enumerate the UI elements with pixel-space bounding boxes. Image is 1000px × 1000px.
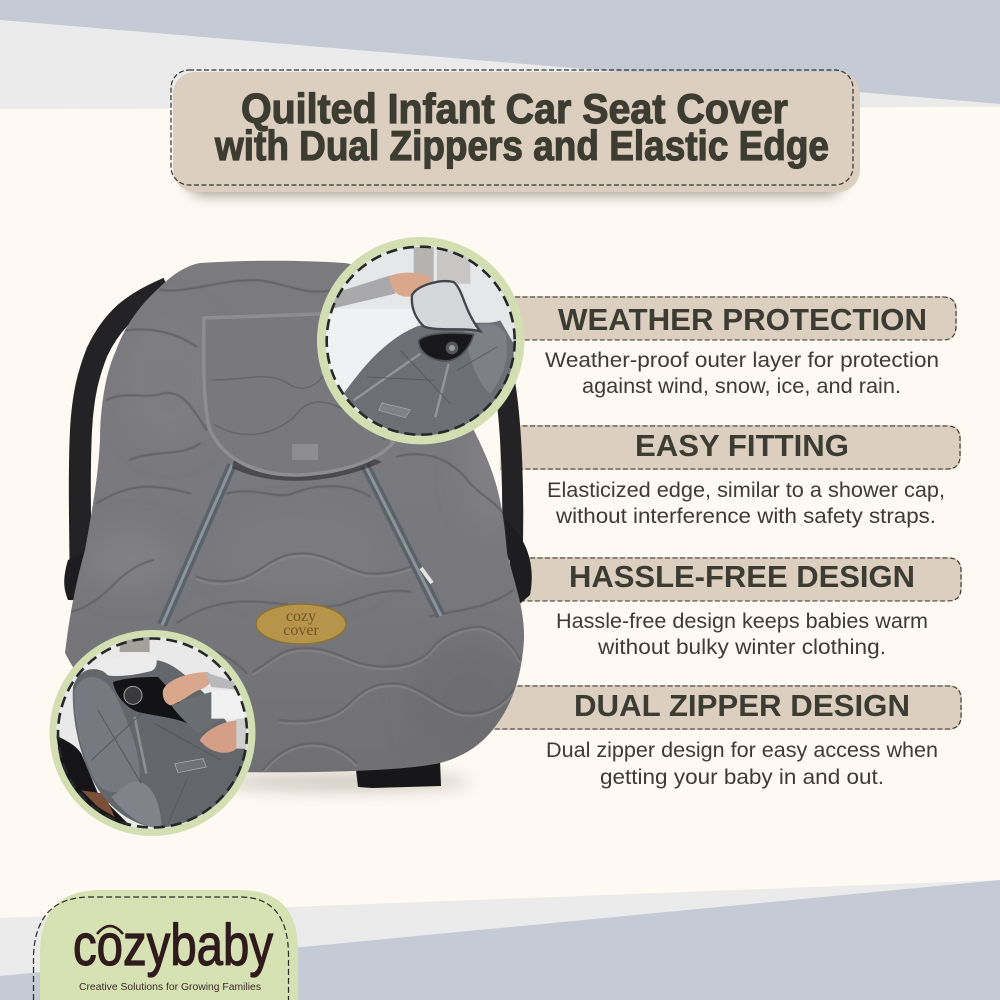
cozy cover logo patch: cozy: [286, 608, 316, 625]
description: Hassle-free design keeps babies warm: [556, 610, 928, 633]
tagline: Creative Solutions for Growing Families: [79, 982, 261, 993]
title text line 2: with Dual Zippers and Elastic Edge: [214, 122, 829, 169]
left zipper: [162, 465, 232, 625]
ground shadow: [220, 773, 470, 791]
title banner: [171, 70, 860, 196]
description: Elasticized edge, similar to a shower cap,: [547, 479, 945, 502]
cozy cover logo patch: [256, 604, 346, 644]
top flap: [204, 313, 393, 481]
banner: [500, 557, 962, 601]
right zipper: [365, 465, 441, 616]
car seat handle: [64, 288, 532, 608]
heading: EASY FITTING: [635, 428, 849, 463]
inset circle: hood flap detail: [317, 237, 524, 444]
logo wordmark: cozybaby: [73, 913, 273, 978]
description: Dual zipper design for easy access when: [546, 739, 938, 762]
feature 1: weather protection: [500, 296, 957, 398]
description: against wind, snow, ice, and rain.: [582, 375, 901, 398]
feature 3: hassle-free design: [500, 557, 962, 659]
heading: DUAL ZIPPER DESIGN: [574, 688, 910, 723]
cozy cover logo patch: cover: [283, 622, 319, 639]
product photo: quilted car seat cover: [60, 255, 532, 791]
puffy shading: [452, 436, 522, 760]
feature 4: dual zipper design: [480, 685, 962, 789]
quilted cover: [60, 255, 530, 780]
description: Weather-proof outer layer for protection: [545, 349, 939, 372]
dashed ring: [327, 247, 515, 435]
banner: [480, 685, 962, 730]
background: top band: [0, 0, 1000, 110]
feature 2: easy fitting: [500, 425, 961, 528]
quilting seams: [70, 280, 520, 773]
car seat base: [356, 760, 441, 788]
background: bottom band: [0, 880, 1000, 1000]
brand badge: cozybaby: [34, 890, 298, 1000]
heading: HASSLE-FREE DESIGN: [569, 559, 915, 594]
logo arc: [97, 926, 123, 934]
description: without bulky winter clothing.: [597, 636, 886, 659]
title text line 1: Quilted Infant Car Seat Cover: [241, 85, 788, 132]
banner: [500, 425, 961, 470]
inset circle: zipper detail: [50, 630, 256, 836]
banner: [500, 296, 957, 340]
dashed ring: [58, 638, 247, 828]
description: without interference with safety straps.: [555, 505, 936, 528]
description: getting your baby in and out.: [600, 766, 884, 789]
heading: WEATHER PROTECTION: [558, 302, 927, 337]
